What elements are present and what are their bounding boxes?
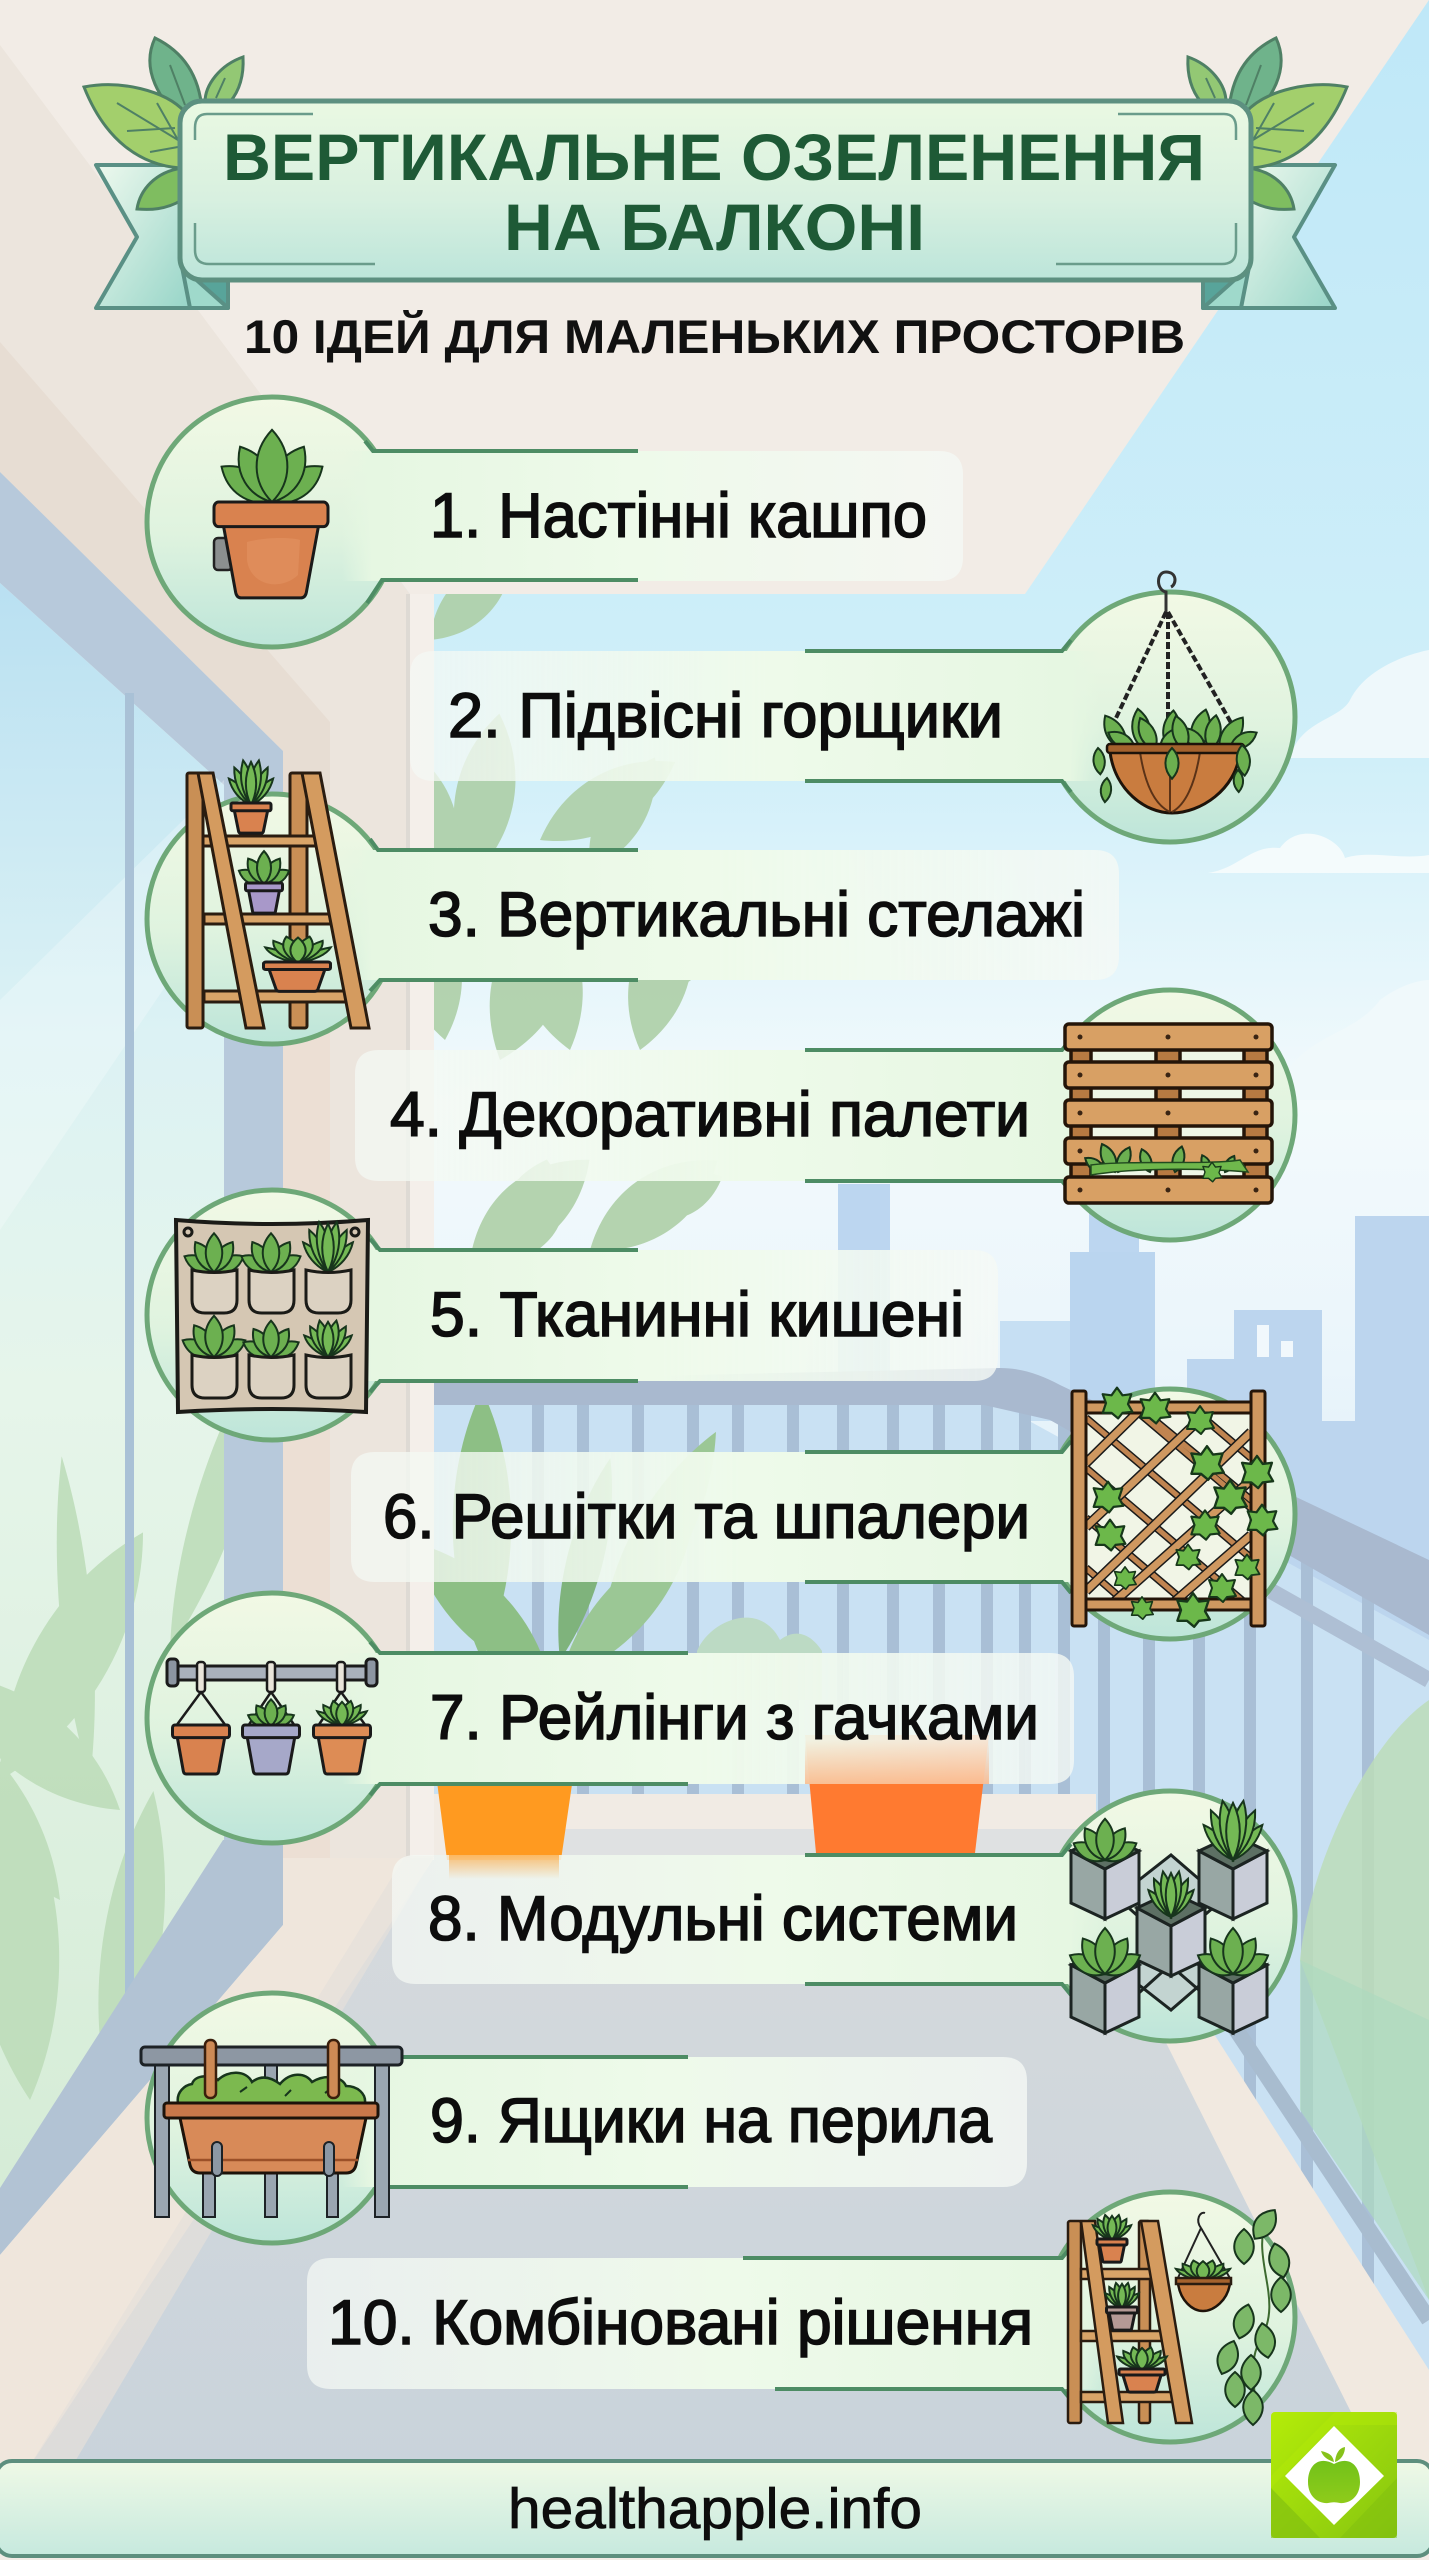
ribbon tails [96,165,1335,308]
panel inner lines [195,114,1236,264]
railing balusters [538,1400,1368,2360]
orange pot glow through pill [805,1740,989,1784]
wall beige [0,45,434,1860]
left blue stripe [0,1840,283,2255]
wall strips [0,342,434,1860]
item 4: decorative pallets [355,990,1295,1240]
item 7: rails with hooks: 7. Рейлінги з гачками [430,1683,1039,1753]
item 4: decorative pallets: 4. Декоративні палети [390,1080,1030,1150]
header ribbon [84,38,1347,308]
glass window [0,583,224,2200]
icon: ladder, hanging pot and vine [1068,2204,1293,2425]
outdoor foliage [389,541,754,1284]
apple [1308,2461,1360,2503]
item 6: trellises [351,1268,1295,1639]
title text: ВЕРТИКАЛЬНЕ ОЗЕЛЕНЕННЯ [223,120,1205,194]
item 1: wall planters [147,397,963,647]
building windows [1257,1325,1293,1357]
handrail [380,1368,1429,1680]
icon: modular hex planters [1066,1800,1272,2033]
icon: wooden ladder shelf [187,759,369,1028]
floor right cream [1060,1856,1429,2470]
city buildings [838,1184,1429,1700]
item 9: railing boxes [141,1993,1027,2243]
title panel [180,101,1251,280]
diamond [1285,2426,1384,2525]
orange pot 2 [805,1735,989,1853]
item 9: railing boxes: 9. Ящики на перила [430,2086,993,2156]
floor [10,1855,1380,2470]
orange pot fade through pill [449,1855,559,1879]
ceiling [0,0,1429,594]
footer url: healthapple.info [508,2477,922,2541]
big plant [393,1390,740,1699]
icon: wall pot [214,430,330,598]
right frame stripe [1130,1870,1429,2320]
floor left cover [27,1856,434,2470]
right green [1300,1960,1429,2300]
subtitle: 10 ІДЕЙ ДЛЯ МАЛЕНЬКИХ ПРОСТОРІВ [244,310,1185,363]
orange pot 1 [433,1750,577,1860]
logo: apple badge [1271,2412,1397,2538]
item 2: hanging pots: 2. Підвісні горщики [448,681,1003,751]
ledge [406,1794,1096,1856]
icon: railing planter box [141,2040,402,2217]
title text [223,120,1205,264]
item 7: rails with hooks [147,1593,1074,1843]
leaves [84,38,1347,209]
blue beam [0,472,283,1860]
item 6: trellises: 6. Решітки та шпалери [383,1482,1030,1552]
item 5: fabric pockets: 5. Тканинні кишені [430,1280,964,1350]
icon: rail with hanging pots [167,1659,377,1774]
window frame bar [125,693,134,2028]
item 5: fabric pockets [147,1190,998,1440]
icon: fabric pocket panel [176,1220,368,1412]
icon: hanging basket [1092,572,1260,813]
title text: НА БАЛКОНІ [504,190,925,264]
footer bar [0,2461,1429,2556]
item 2: hanging pots [410,572,1295,842]
clouds [1208,650,1429,1100]
right bush [1300,1700,1429,2300]
item 3: vertical shelves: 3. Вертикальні стелажі [428,880,1085,950]
icon: lattice trellis [1072,1268,1277,1627]
lower sky behind railing [434,1405,1429,2400]
bush behind pots [697,1618,822,1700]
sky [380,0,1429,1900]
icon: pallet [1065,1024,1272,1203]
glass light streak [0,780,224,1230]
item 3: vertical shelves [147,759,1119,1044]
item 10: combined solutions [307,2192,1295,2442]
left cream stripe [0,1858,434,2470]
item 8: modular systems [392,1791,1295,2041]
item 8: modular systems: 8. Модульні системи [428,1884,1018,1954]
item 10: combined solutions: 10. Комбіновані рішення [328,2288,1033,2358]
item 1: wall planters: 1. Настінні кашпо [430,481,927,551]
left foliage [0,1431,224,2100]
